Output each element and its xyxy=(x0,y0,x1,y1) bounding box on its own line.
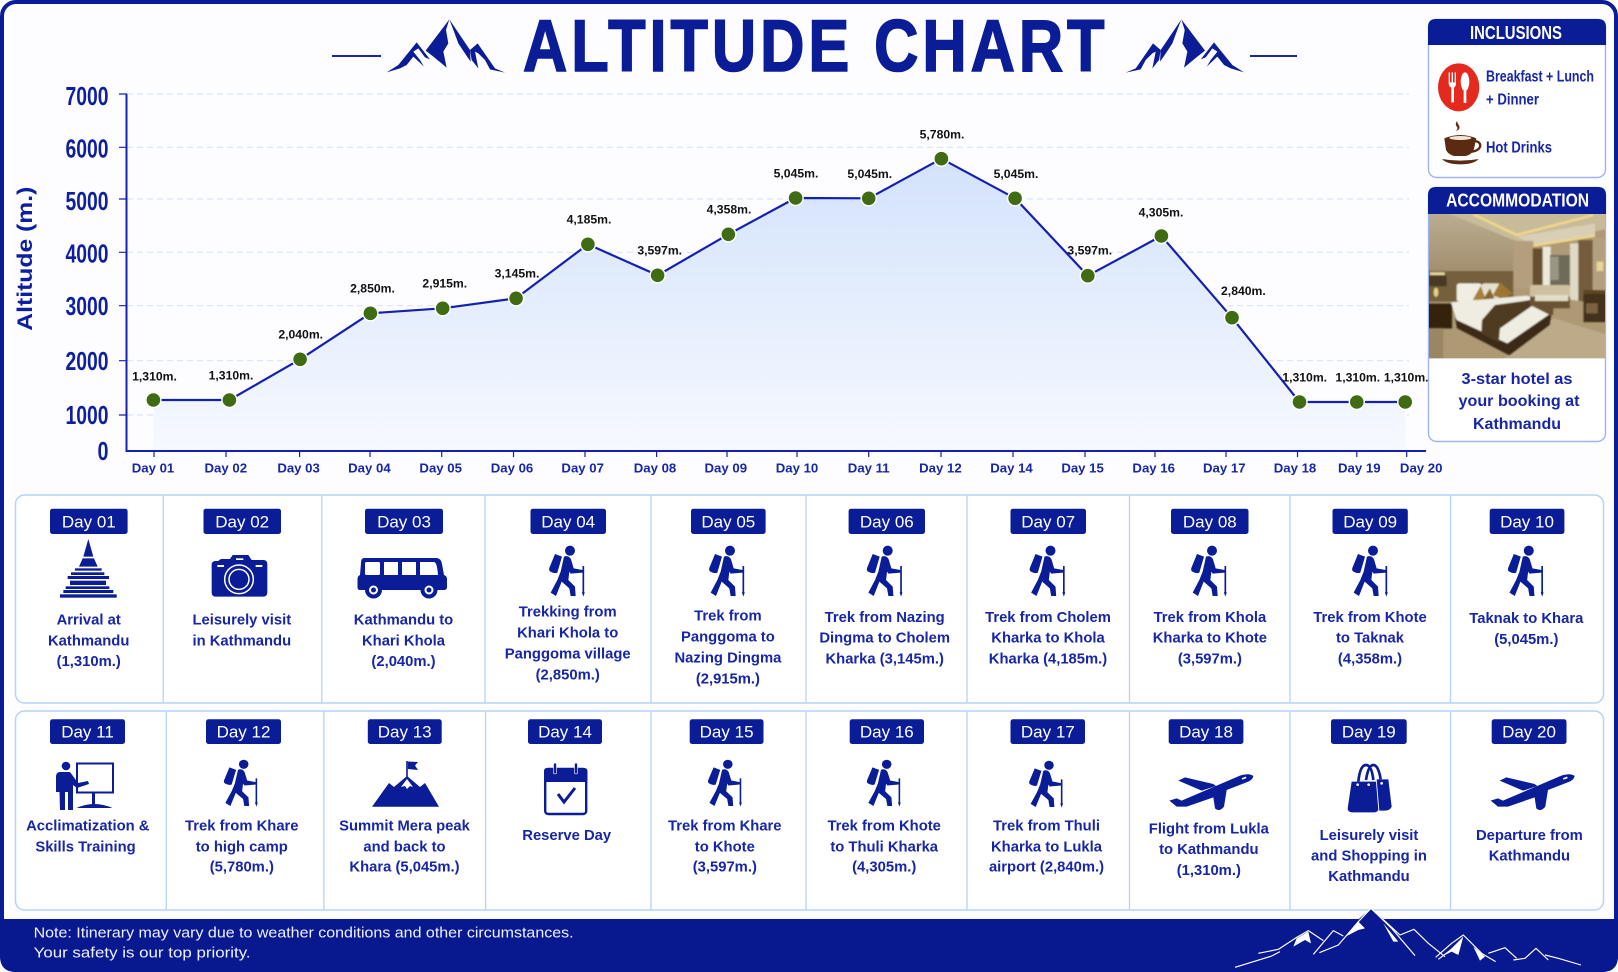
description: day 20 xyxy=(1476,828,1583,865)
card: day 11 xyxy=(26,719,150,855)
icon: trainer at board xyxy=(56,762,113,810)
description: day 19: Kathmandu xyxy=(1328,869,1410,885)
card: day 10 xyxy=(1469,509,1584,648)
description: day 09: to Taknak xyxy=(1336,631,1405,647)
description: day 05 xyxy=(674,609,782,687)
altitude value labels: 1,310m. xyxy=(1384,371,1429,385)
description: day 13 xyxy=(339,818,471,876)
accommodation heading: ACCOMMODATION xyxy=(1446,191,1589,211)
y axis labels: 5000 xyxy=(66,186,108,216)
description: day 16: to Thuli Kharka xyxy=(830,839,939,855)
inclusions heading: INCLUSIONS xyxy=(1470,23,1562,43)
icon: hiker xyxy=(867,760,901,807)
description: day 01 xyxy=(48,612,129,670)
description: day 09: (4,358m.) xyxy=(1338,651,1402,667)
description: day 04: Khari Khola to xyxy=(517,626,618,642)
card: day 17 xyxy=(989,719,1104,876)
row 2 frame xyxy=(16,711,1604,910)
card: day 19 xyxy=(1311,719,1427,885)
altitude value labels: 2,850m. xyxy=(350,282,395,296)
altitude value labels: 5,780m. xyxy=(920,128,964,142)
badge: day 19 xyxy=(1331,719,1407,744)
icon: stupa xyxy=(60,539,117,598)
description: day 17: airport (2,840m.) xyxy=(989,860,1104,876)
description: day 03: Kathmandu to xyxy=(354,612,453,628)
y axis labels: 2000 xyxy=(66,346,108,376)
badge: day 07: Day 07 xyxy=(1021,513,1075,532)
description: day 17: Kharka to Lukla xyxy=(991,839,1103,855)
altitude value labels: 4,358m. xyxy=(707,203,751,217)
icon: camera xyxy=(212,555,267,597)
description: day 17 xyxy=(989,818,1104,876)
card: day 02 xyxy=(192,509,291,649)
y axis labels: 0 xyxy=(98,436,108,466)
altitude value labels: 5,045m. xyxy=(847,167,892,181)
icon: calendar xyxy=(544,763,587,814)
altitude line xyxy=(153,159,1405,402)
footer note xyxy=(34,925,574,962)
badge: day 02 xyxy=(204,509,281,534)
icon: hiker xyxy=(867,546,902,597)
badge: day 04 xyxy=(530,509,606,534)
altitude value labels: 1,310m. xyxy=(132,370,177,384)
altitude value labels: 1,310m. xyxy=(1282,371,1327,385)
badge: day 08: Day 08 xyxy=(1183,513,1237,532)
description: day 18: Flight from Lukla xyxy=(1149,821,1270,837)
data points xyxy=(146,151,1413,409)
altitude value labels: 2,840m. xyxy=(1221,284,1266,298)
card: day 14 xyxy=(522,719,612,844)
card: day 01 xyxy=(48,509,129,670)
description: day 07: Kharka to Khola xyxy=(991,631,1105,647)
icon: right mountain xyxy=(1126,19,1244,73)
area under the altitude line xyxy=(153,159,1405,450)
icon: airplane xyxy=(1491,774,1575,810)
description: day 06 xyxy=(819,610,950,667)
description: day 02 xyxy=(192,612,291,649)
description: day 19: and Shopping in xyxy=(1311,849,1427,865)
x axis labels: Day 02 xyxy=(205,461,247,476)
footer band xyxy=(0,908,1618,972)
accommodation text xyxy=(1458,371,1580,433)
description: day 15: (3,597m.) xyxy=(693,860,757,876)
accommodation text: 3-star hotel as xyxy=(1462,371,1573,388)
badge: day 05 xyxy=(691,509,766,534)
icon: hot drink xyxy=(1442,121,1480,164)
axis ticks xyxy=(119,94,1407,457)
description: day 03: (2,040m.) xyxy=(371,654,436,670)
badge: day 20 xyxy=(1492,719,1566,744)
description: day 19: Leisurely visit xyxy=(1320,828,1418,844)
badge: day 04: Day 04 xyxy=(541,513,595,532)
badge: day 17 xyxy=(1010,719,1085,744)
x axis labels: Day 04 xyxy=(348,461,391,476)
badge: day 14: Day 14 xyxy=(538,723,592,742)
y axis title: Altitude (m.) xyxy=(14,187,37,331)
icon: hiker xyxy=(1030,546,1065,597)
icon: hiker xyxy=(1508,546,1543,597)
card: day 08 xyxy=(1153,509,1267,667)
badge: day 17: Day 17 xyxy=(1021,723,1075,742)
description: day 07 xyxy=(985,610,1111,667)
description: day 10: Taknak to Khara xyxy=(1469,611,1584,627)
badge: day 10: Day 10 xyxy=(1500,513,1554,532)
description: day 10: (5,045m.) xyxy=(1494,632,1558,648)
x axis labels: Day 05 xyxy=(419,461,462,476)
description: day 08 xyxy=(1153,610,1267,667)
altitude value labels: 2,915m. xyxy=(422,277,467,291)
description: day 03: Khari Khola xyxy=(362,633,446,649)
description: day 07: Trek from Cholem xyxy=(985,610,1111,626)
inclusions card xyxy=(1428,20,1606,178)
icon: summit flag xyxy=(372,761,439,807)
footer note: Note: Itinerary may vary due to weather conditions and other circumstances. xyxy=(34,925,574,941)
footer mountain line art xyxy=(1235,908,1581,967)
description: day 04: Panggoma village xyxy=(505,647,631,663)
badge: day 12: Day 12 xyxy=(217,723,270,742)
meals text: + Dinner xyxy=(1486,92,1539,109)
axes xyxy=(126,94,1426,451)
row 1 frame xyxy=(16,495,1604,703)
description: day 05: (2,915m.) xyxy=(696,671,760,687)
x axis labels: Day 08 xyxy=(634,461,676,476)
description: day 12: to high camp xyxy=(196,839,288,855)
y axis labels: 4000 xyxy=(66,238,108,268)
icon: hiker xyxy=(1191,546,1227,597)
x axis labels: Day 19 xyxy=(1338,461,1381,476)
icon: hiker xyxy=(1029,761,1063,808)
left title rule xyxy=(332,55,381,57)
badge: day 15 xyxy=(690,719,764,744)
panel: accommodation xyxy=(1425,187,1609,442)
card: day 06 xyxy=(819,509,950,667)
description: day 04 xyxy=(505,605,631,684)
icon: hiker xyxy=(1352,546,1388,597)
altitude value labels: 4,305m. xyxy=(1139,205,1183,219)
hot drinks text: Hot Drinks xyxy=(1486,140,1552,157)
description: day 13: and back to xyxy=(363,839,446,855)
description: day 18 xyxy=(1149,821,1270,879)
x axis labels: Day 18 xyxy=(1274,461,1316,476)
y axis labels xyxy=(66,81,108,466)
description: day 08: (3,597m.) xyxy=(1178,651,1242,667)
description: day 15: Trek from Khare xyxy=(668,818,782,834)
description: day 17: Trek from Thuli xyxy=(993,818,1100,834)
badge: day 12 xyxy=(206,719,281,744)
altitude value labels: 3,145m. xyxy=(495,266,539,280)
description: day 16: (4,305m.) xyxy=(852,860,916,876)
accommodation text: Kathmandu xyxy=(1473,416,1561,433)
description: day 20: Departure from xyxy=(1476,828,1583,844)
panel: inclusions xyxy=(1428,19,1606,178)
badge: day 11: Day 11 xyxy=(61,723,114,742)
badge: day 16 xyxy=(850,719,924,744)
inclusions header xyxy=(1428,19,1606,45)
x axis labels xyxy=(132,461,1442,476)
x axis labels: Day 10 xyxy=(776,461,818,476)
altitude value labels: 5,045m. xyxy=(994,167,1038,181)
badge: day 13: Day 13 xyxy=(378,723,432,742)
title banner xyxy=(332,6,1297,87)
title: ALTITUDE CHART xyxy=(523,6,1108,87)
icon: shopping bags xyxy=(1348,765,1392,812)
card: day 13 xyxy=(339,719,471,876)
icon: left mountain xyxy=(387,19,505,73)
x axis labels: Day 03 xyxy=(277,461,320,476)
description: day 06: Kharka (3,145m.) xyxy=(825,651,944,667)
x axis labels: Day 06 xyxy=(491,461,533,476)
description: day 14: Reserve Day xyxy=(522,828,612,844)
meals text: Breakfast + Lunch xyxy=(1486,69,1594,86)
description: day 02: in Kathmandu xyxy=(192,633,291,649)
description: day 10 xyxy=(1469,611,1584,648)
description: day 12: Trek from Khare xyxy=(185,818,299,834)
badge: day 02: Day 02 xyxy=(215,513,269,532)
badge: day 03 xyxy=(365,509,443,534)
altitude value labels xyxy=(132,128,1429,385)
badge: day 09 xyxy=(1332,509,1408,534)
footer note: Your safety is our top priority. xyxy=(34,946,251,962)
chart gridlines xyxy=(127,94,1409,415)
accommodation card xyxy=(1428,188,1606,442)
hotel room illustration xyxy=(1425,211,1609,362)
meals text xyxy=(1486,69,1594,109)
badge: day 19: Day 19 xyxy=(1342,723,1396,742)
description: day 05: Nazing Dingma xyxy=(674,651,782,667)
description: day 12 xyxy=(185,818,299,876)
x axis labels: Day 16 xyxy=(1132,461,1175,476)
description: day 11 xyxy=(26,818,150,855)
description: day 16 xyxy=(827,818,941,876)
x axis labels: Day 12 xyxy=(919,461,962,476)
description: day 09 xyxy=(1313,610,1427,667)
card: day 16 xyxy=(827,719,941,876)
description: day 16: Trek from Khote xyxy=(827,818,941,834)
y axis labels: 6000 xyxy=(66,133,108,163)
accommodation text: your booking at xyxy=(1458,393,1580,410)
altitude value labels: 1,310m. xyxy=(1335,371,1380,385)
description: day 01: (1,310m.) xyxy=(57,654,121,670)
icon: hiker xyxy=(709,546,745,597)
description: day 20: Kathmandu xyxy=(1489,849,1570,865)
description: day 01: Arrival at xyxy=(57,612,121,628)
accommodation header xyxy=(1428,187,1606,214)
badge: day 03: Day 03 xyxy=(377,513,431,532)
altitude value labels: 5,045m. xyxy=(774,167,818,181)
altitude value labels: 2,040m. xyxy=(278,327,323,341)
badge: day 15: Day 15 xyxy=(700,723,754,742)
icon: airplane xyxy=(1169,774,1253,810)
altitude value labels: 4,185m. xyxy=(567,213,611,227)
badge: day 18: Day 18 xyxy=(1179,723,1233,742)
badge: day 01 xyxy=(50,509,128,534)
description: day 08: Trek from Khola xyxy=(1154,610,1267,626)
card: day 12 xyxy=(185,719,299,876)
card: day 04 xyxy=(505,509,631,684)
description: day 19 xyxy=(1311,828,1427,885)
badge: day 01: Day 01 xyxy=(62,513,116,532)
badge: day 07 xyxy=(1010,509,1086,534)
x axis labels: Day 17 xyxy=(1203,461,1246,476)
description: day 18: (1,310m.) xyxy=(1177,863,1241,879)
icon: meals xyxy=(1438,63,1479,111)
description: day 04: (2,850m.) xyxy=(536,668,600,684)
x axis labels: Day 14 xyxy=(990,461,1033,476)
badge: day 06: Day 06 xyxy=(860,513,914,532)
badge: day 09: Day 09 xyxy=(1343,513,1397,532)
x axis labels: Day 01 xyxy=(132,461,174,476)
card: day 20 xyxy=(1476,719,1583,865)
y axis labels: 7000 xyxy=(66,81,108,111)
right title rule xyxy=(1250,55,1297,57)
footer background xyxy=(0,919,1618,972)
altitude chart xyxy=(14,81,1442,476)
description: day 15: to Khote xyxy=(695,839,755,855)
description: day 11: Skills Training xyxy=(35,839,136,855)
description: day 13: Khara (5,045m.) xyxy=(349,860,460,876)
card: day 15 xyxy=(668,719,782,876)
badge: day 18 xyxy=(1169,719,1243,744)
badge: day 08 xyxy=(1171,509,1248,534)
icon: hiker xyxy=(549,546,585,597)
altitude value labels: 3,597m. xyxy=(637,244,682,258)
altitude value labels: 3,597m. xyxy=(1067,244,1112,258)
description: day 06: Dingma to Cholem xyxy=(819,631,950,647)
description: day 11: Acclimatization & xyxy=(26,818,150,834)
card: day 18 xyxy=(1149,719,1270,879)
description: day 06: Trek from Nazing xyxy=(825,610,945,626)
badge: day 05: Day 05 xyxy=(701,513,755,532)
icon: bus xyxy=(358,558,447,598)
y axis labels: 1000 xyxy=(66,400,108,430)
description: day 05: Trek from xyxy=(694,609,762,625)
x axis labels: Day 20 xyxy=(1400,461,1442,476)
description: day 15 xyxy=(668,818,782,876)
x axis labels: Day 09 xyxy=(705,461,747,476)
description: day 12: (5,780m.) xyxy=(210,860,274,876)
description: day 07: Kharka (4,185m.) xyxy=(989,651,1107,667)
card: day 05 xyxy=(674,509,782,687)
description: day 02: Leisurely visit xyxy=(192,612,291,628)
icon: hiker xyxy=(708,760,742,807)
description: day 13: Summit Mera peak xyxy=(339,818,471,834)
panel: itinerary row 2 xyxy=(16,711,1604,910)
description: day 08: Kharka to Khote xyxy=(1153,631,1267,647)
card: day 07 xyxy=(985,509,1111,667)
description: day 04: Trekking from xyxy=(519,605,617,621)
y axis labels: 3000 xyxy=(66,291,108,321)
description: day 03 xyxy=(354,612,453,670)
panel: itinerary row 1 xyxy=(16,495,1604,703)
description: day 09: Trek from Khote xyxy=(1313,610,1427,626)
badge: day 16: Day 16 xyxy=(860,723,914,742)
description: day 01: Kathmandu xyxy=(48,633,129,649)
icon: hiker xyxy=(224,760,258,807)
description: day 05: Panggoma to xyxy=(681,630,775,646)
card: day 09 xyxy=(1313,509,1427,667)
badge: day 06 xyxy=(849,509,925,534)
badge: day 13 xyxy=(368,719,442,744)
x axis labels: Day 11 xyxy=(848,461,890,476)
badge: day 20: Day 20 xyxy=(1502,723,1556,742)
altitude value labels: 1,310m. xyxy=(209,368,253,382)
x axis labels: Day 07 xyxy=(561,461,604,476)
card: day 03 xyxy=(354,509,453,670)
x axis labels: Day 15 xyxy=(1061,461,1104,476)
description: day 18: to Kathmandu xyxy=(1159,842,1259,858)
